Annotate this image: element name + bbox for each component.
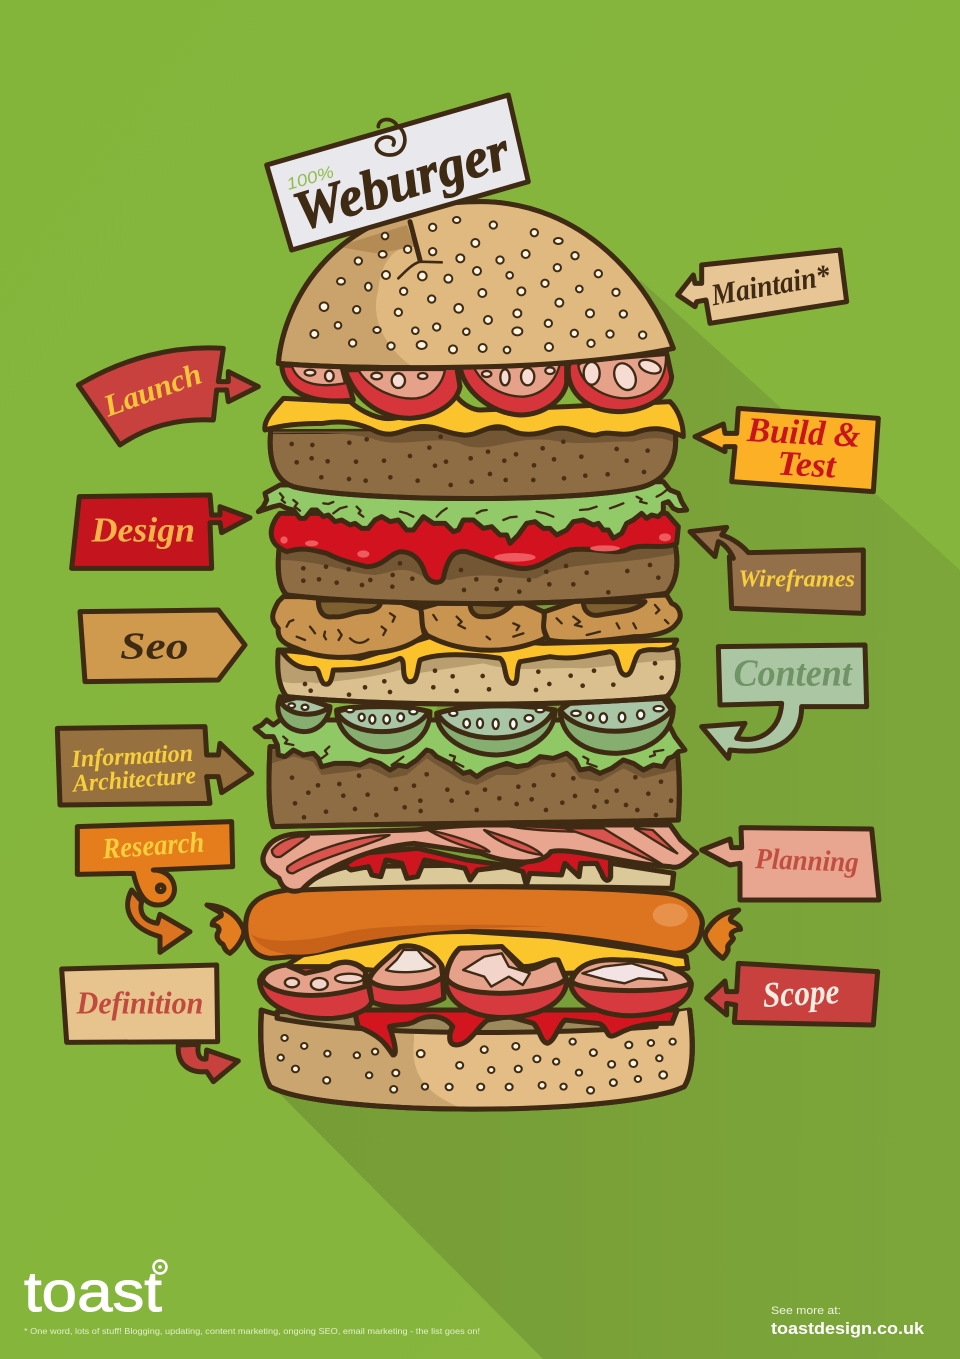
bacon ketchup [344, 848, 611, 885]
Weburger: Weburger [286, 119, 518, 244]
bottom bun, sausage and tomatoes [207, 825, 740, 1110]
see more at: See more at: [771, 1305, 841, 1317]
sign stick and crack [398, 222, 442, 278]
label: Maintain: Maintain* [708, 258, 833, 312]
sesame seeds [310, 217, 646, 353]
top bun [278, 190, 677, 368]
labels: right upper [678, 250, 878, 758]
label: Seo: Seo [120, 625, 188, 667]
label: Wireframes [690, 527, 863, 613]
lower ketchup [354, 1010, 677, 1055]
upper lettuce [258, 482, 687, 543]
middle cheese [281, 637, 677, 684]
label: Seo [80, 610, 245, 682]
pale bun slice [302, 863, 674, 890]
onion rings [273, 595, 680, 657]
ketchup [271, 513, 678, 582]
label: Scope: Scope [762, 971, 840, 1015]
label: Information Architecture: Architecture [70, 762, 197, 798]
label: Content [702, 645, 867, 758]
middle layers: lettuce, patties, cucumber, onion rings [255, 482, 687, 827]
sausage ties [207, 905, 740, 958]
lower cheese [284, 930, 688, 977]
labels: left lower [62, 822, 238, 1082]
label: Planning: Planning [754, 843, 859, 879]
cucumber slices [278, 697, 673, 755]
100%: 100% [284, 162, 336, 194]
patty sliver [277, 1012, 656, 1032]
labels: right lower [702, 828, 879, 1025]
sausage [246, 887, 702, 958]
label: Definition: Definition [76, 984, 203, 1020]
label: Design: Design [91, 511, 195, 550]
bottom bun [261, 1010, 692, 1110]
top tomatoes [282, 353, 672, 418]
lower lettuce [255, 720, 685, 777]
website: toastdesign.co.uk [771, 1319, 925, 1338]
label: Research [77, 822, 233, 952]
large patty [269, 747, 679, 827]
lighter bun highlight [376, 204, 670, 366]
label: Content: Content [733, 653, 853, 695]
label: Definition [62, 965, 238, 1082]
label: Build and Test: Test [776, 444, 838, 486]
label: Maintain [678, 250, 847, 323]
label: Design [72, 495, 250, 568]
sausage highlight [653, 903, 688, 927]
lower tomatoes [260, 946, 691, 1018]
sign hook [376, 120, 405, 155]
label: Information Architecture [57, 727, 252, 805]
toast logo: toast [24, 1260, 162, 1324]
long drop shadow [262, 280, 960, 1359]
label: Launch: Launch [98, 357, 206, 424]
label: Scope [707, 963, 878, 1025]
title sign [267, 95, 528, 250]
middle bun [278, 647, 678, 704]
top bun section [265, 95, 683, 499]
label: Build and Test: Build & [745, 410, 862, 455]
label: Launch [78, 348, 258, 445]
label: Planning [702, 828, 879, 900]
label: Information Architecture: Information [70, 740, 194, 773]
bacon [263, 825, 697, 891]
label: Research: Research [101, 827, 205, 866]
ring holes [318, 600, 381, 617]
burger [207, 95, 740, 1110]
footnote: * One word, lots of stuff! Blogging, updating, content marketing, ongoing SEO, email marketing - the list goes on! [24, 1326, 480, 1336]
label: Wireframes: Wireframes [738, 566, 855, 593]
top cheese [265, 397, 683, 437]
labels: left upper [57, 348, 258, 805]
sign shadow on bun [337, 225, 415, 253]
ketchup highlights [280, 533, 671, 562]
label: Build and Test [695, 408, 878, 492]
top patty [267, 423, 677, 499]
second patty [278, 543, 677, 604]
